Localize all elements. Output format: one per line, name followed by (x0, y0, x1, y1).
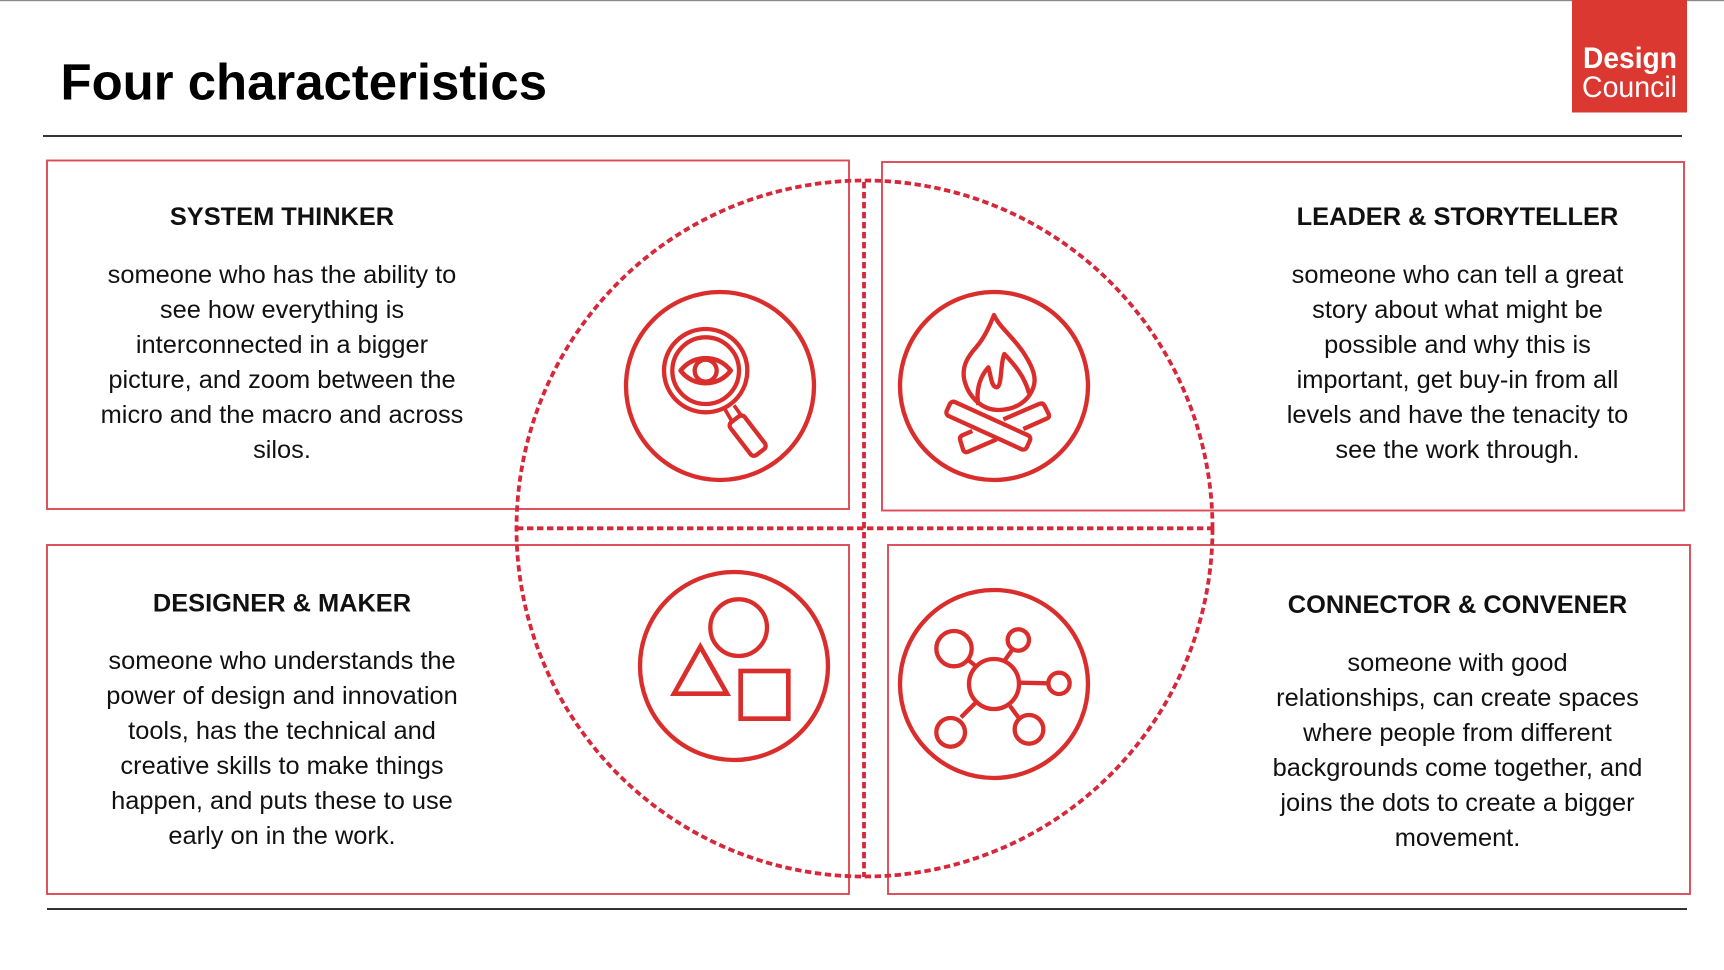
text block: system thinker: silos. (253, 436, 311, 464)
text block: connector and convener: joins the dots to create a bigger (1279, 789, 1635, 817)
panel: connector and convener (888, 545, 1690, 894)
heading: system thinker: SYSTEM THINKER (170, 203, 394, 231)
title: Four characteristics (60, 54, 547, 110)
text block: system thinker: picture, and zoom between the (108, 366, 456, 394)
icon: connected network (900, 590, 1088, 778)
text block: system thinker: someone who has the ability to (108, 261, 456, 289)
panel: system thinker (47, 160, 849, 509)
heading: connector and convener: CONNECTOR & CONVENER (1288, 591, 1627, 619)
text block: leader and storyteller (1287, 261, 1628, 464)
icon: magnifying glass with eye (626, 292, 814, 480)
dotted quartered circle (516, 180, 1212, 877)
logo: Design Council: Council (1582, 71, 1677, 104)
text block: designer and maker: happen, and puts these to use (111, 787, 453, 815)
panel: leader and storyteller (882, 162, 1684, 510)
text block: connector and convener: backgrounds come together, and (1273, 754, 1642, 782)
text block: designer and maker: tools, has the technical and (128, 717, 436, 745)
text block: designer and maker: someone who understands the (108, 647, 456, 675)
icon: campfire (900, 292, 1088, 480)
logo: Design Council: Design (1583, 42, 1677, 75)
text block: leader and storyteller: levels and have the tenacity to (1287, 401, 1628, 429)
text block: connector and convener: where people from different (1302, 719, 1612, 747)
text block: designer and maker: early on in the work. (168, 822, 396, 850)
text block: designer and maker: creative skills to make things (120, 752, 444, 780)
text block: leader and storyteller: story about what might be (1312, 296, 1603, 324)
text block: connector and convener (1273, 649, 1642, 852)
text block: system thinker: micro and the macro and across (101, 401, 463, 429)
icon: circle, triangle and square (640, 572, 828, 760)
text block: leader and storyteller: someone who can tell a great (1292, 261, 1623, 289)
text block: system thinker: see how everything is (160, 296, 404, 324)
text block: connector and convener: movement. (1395, 824, 1520, 852)
panel: designer and maker (47, 545, 849, 894)
heading: leader and storyteller: LEADER & STORYTELLER (1297, 203, 1618, 231)
text block: connector and convener: relationships, can create spaces (1276, 684, 1639, 712)
logo: Design Council (1572, 0, 1687, 112)
text block: designer and maker: power of design and innovation (106, 682, 458, 710)
text block: connector and convener: someone with good (1347, 649, 1568, 677)
text block: system thinker (101, 261, 463, 464)
heading: designer and maker: DESIGNER & MAKER (153, 590, 411, 618)
text block: designer and maker (106, 647, 458, 850)
text block: leader and storyteller: possible and why this is (1324, 331, 1591, 359)
text block: system thinker: interconnected in a bigger (136, 331, 429, 359)
text block: leader and storyteller: important, get buy-in from all (1297, 366, 1618, 394)
text block: leader and storyteller: see the work through. (1335, 436, 1580, 464)
